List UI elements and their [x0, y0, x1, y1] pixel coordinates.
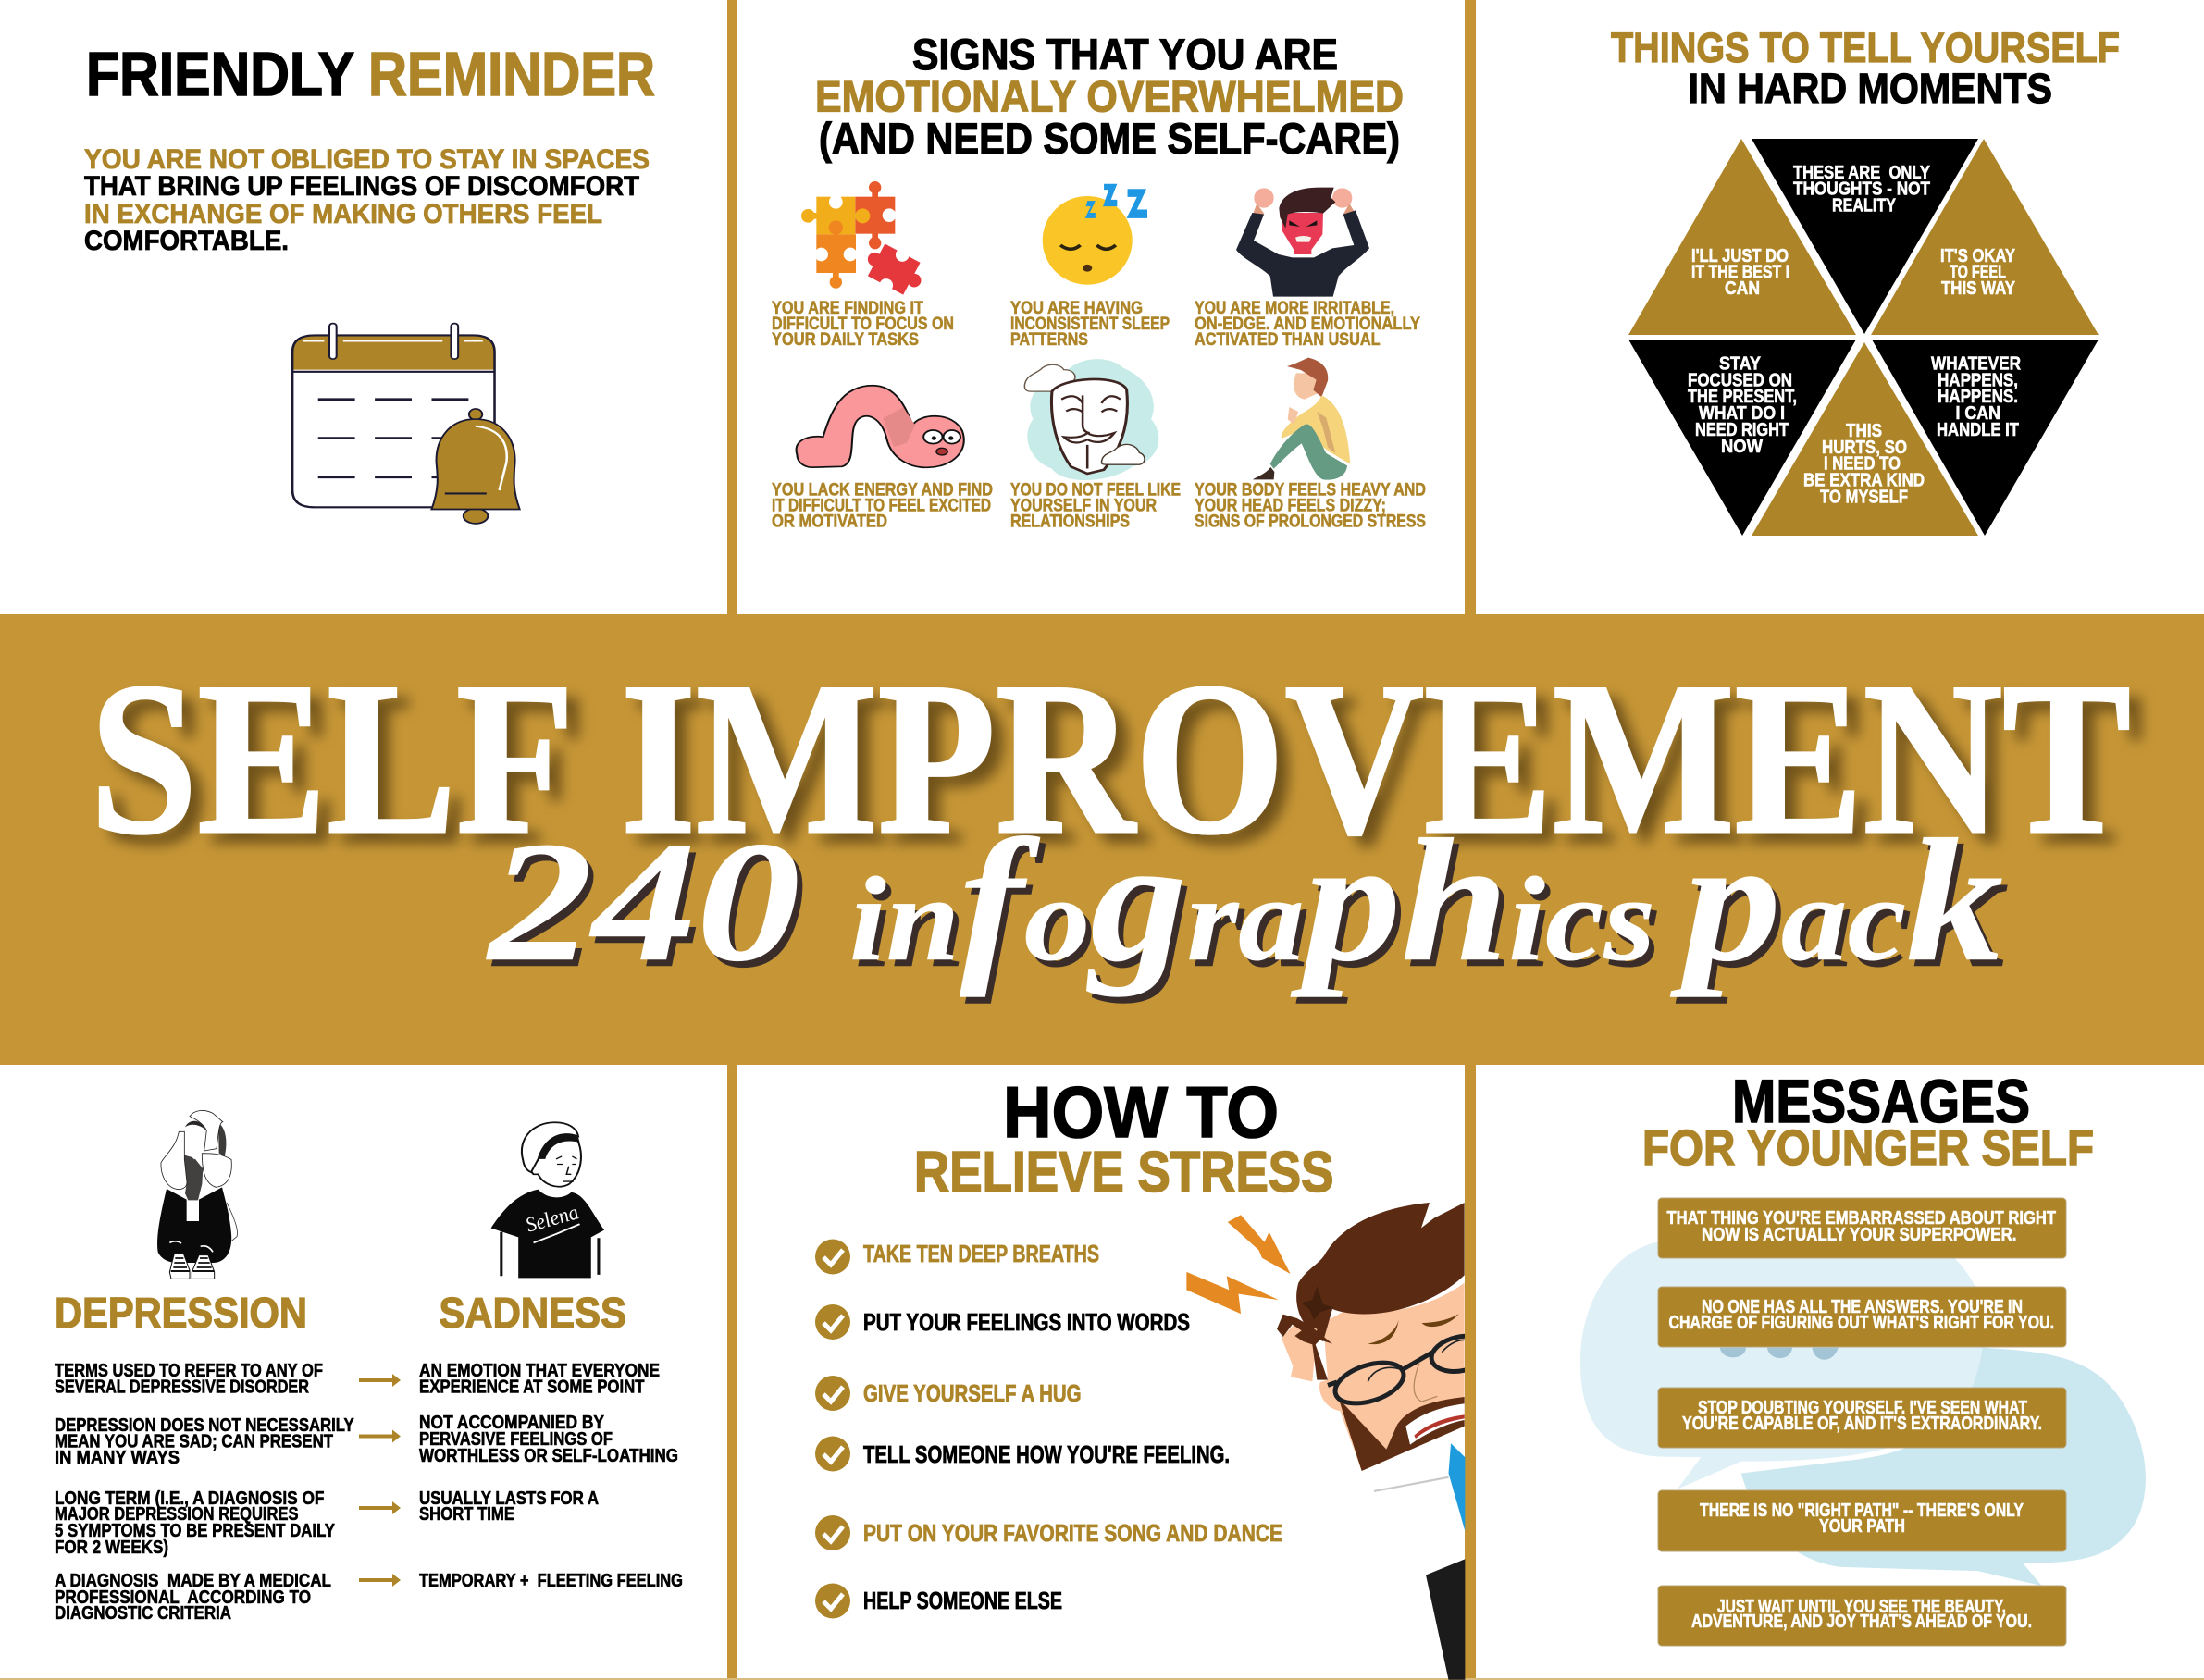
text: steps: TAKE TEN DEEP BREATHS [863, 1240, 1099, 1267]
text: steps: GIVE YOURSELF A HUG [863, 1379, 1082, 1407]
caption: row one: YOU ARE HAVING [1010, 299, 1143, 318]
panel: signs of emotional overwhelm [772, 30, 1426, 532]
text block: sadness points: PERVASIVE FEELINGS OF [419, 1429, 613, 1450]
text: triangle messages: FOCUSED ON [1688, 370, 1792, 390]
checklist: stress relief steps [815, 1240, 1282, 1619]
icon: lightning bolts [1186, 1215, 1291, 1314]
message box 2: NO ONE HAS ALL THE ANSWERS. YOU'RE IN [1702, 1297, 2023, 1317]
heading: things to tell yourself [1611, 24, 2120, 112]
illustration: stressed man [1277, 1203, 1492, 1471]
text block: reminder body: IN EXCHANGE OF MAKING OTHERS FEEL [84, 199, 602, 229]
text: triangle messages: THESE ARE ONLY [1793, 163, 1931, 183]
arrows: depression to sadness [359, 1374, 401, 1587]
caption: row one: YOUR DAILY TASKS [772, 330, 919, 350]
text: triangle messages: NEED RIGHT [1695, 420, 1789, 440]
text: triangle messages: NOW [1721, 437, 1763, 457]
caption: row two: YOURSELF IN YOUR [1010, 497, 1157, 516]
icon: calendar with bell [292, 324, 520, 524]
message box 3: YOU'RE CAPABLE OF, AND IT'S EXTRAORDINARY. [1682, 1414, 2042, 1434]
subtitle: 240 infographics pack: pack [1670, 804, 2003, 998]
message box 5 [1658, 1586, 2066, 1646]
text: steps [863, 1240, 1282, 1614]
text block: sadness points: TEMPORARY + FLEETING FEELING [419, 1571, 683, 1591]
heading: messages for younger self [1642, 1067, 2094, 1176]
heading: messages for younger self: FOR YOUNGER SELF [1642, 1120, 2094, 1176]
text: triangle messages: THIS [1846, 421, 1882, 441]
panel: depression vs sadness [55, 1110, 683, 1624]
text: triangle messages: THIS WAY [1941, 278, 2016, 299]
caption: row two [772, 481, 1426, 532]
panel: messages for younger self [1580, 1067, 2146, 1646]
caption: row one [772, 299, 1420, 350]
heading: things to tell yourself: THINGS TO TELL YOURSELF [1611, 24, 2120, 71]
message box 1: THAT THING YOU'RE EMBARRASSED ABOUT RIGHT [1667, 1208, 2056, 1229]
text block: reminder body: COMFORTABLE. [84, 226, 289, 256]
text block: depression points: A DIAGNOSIS MADE BY A MEDICAL [55, 1571, 331, 1591]
heading: signs: SIGNS THAT YOU ARE [912, 30, 1338, 79]
caption: row one: PATTERNS [1010, 330, 1088, 350]
message box 3 [1658, 1388, 2066, 1448]
caption: row two: SIGNS OF PROLONGED STRESS [1195, 513, 1426, 532]
text: triangle messages: TO FEEL [1950, 262, 2006, 282]
caption: row one: DIFFICULT TO FOCUS ON [772, 315, 954, 334]
text block: sadness points [419, 1361, 683, 1591]
text block: reminder body [84, 144, 650, 256]
text block: sadness points: AN EMOTION THAT EVERYONE [419, 1361, 660, 1381]
icon: puzzle pieces [801, 181, 932, 305]
text block: reminder body: YOU ARE NOT OBLIGED TO STAY IN SPACES [84, 144, 650, 175]
text: triangle messages: I NEED TO [1824, 454, 1901, 475]
message box 2 [1658, 1287, 2066, 1347]
subtitle: 240 infographics pack: infographics [849, 804, 1655, 998]
text block: depression points: IN MANY WAYS [55, 1448, 180, 1468]
text: triangle messages: IT'S OKAY [1940, 246, 2016, 266]
caption: row two: YOU LACK ENERGY AND FIND [772, 481, 993, 500]
text block: depression points: FOR 2 WEEKS) [55, 1538, 168, 1558]
text block: sadness points: USUALLY LASTS FOR A [419, 1489, 599, 1509]
icon: sad boy in tee: Selena [522, 1201, 582, 1237]
text: triangle messages: HURTS, SO [1822, 438, 1907, 458]
text: triangle messages: THE PRESENT, [1688, 387, 1797, 407]
caption: row two: OR MOTIVATED [772, 513, 887, 532]
message box 1: NOW IS ACTUALLY YOUR SUPERPOWER. [1702, 1225, 2017, 1245]
caption: row one: YOU ARE MORE IRRITABLE, [1195, 299, 1394, 318]
message box 5: JUST WAIT UNTIL YOU SEE THE BEAUTY, [1717, 1597, 2006, 1617]
text: steps: HELP SOMEONE ELSE [863, 1587, 1062, 1614]
message box 3: STOP DOUBTING YOURSELF. I'VE SEEN WHAT [1698, 1398, 2027, 1418]
icon: girl hiding her face [157, 1110, 238, 1279]
caption: row two: RELATIONSHIPS [1010, 513, 1130, 532]
heading: signs: EMOTIONALY OVERWHELMED [815, 72, 1404, 120]
caption: row one: ON-EDGE. AND EMOTIONALLY [1195, 315, 1420, 334]
heading: things to tell yourself: IN HARD MOMENTS [1688, 65, 2052, 112]
caption: row one: ACTIVATED THAN USUAL [1195, 330, 1381, 350]
heading: signs: (AND NEED SOME SELF-CARE) [819, 114, 1400, 163]
subtitle: 240 infographics pack: 240 [485, 807, 800, 997]
heading: depression: DEPRESSION [55, 1289, 307, 1337]
message box 2: CHARGE OF FIGURING OUT WHAT'S RIGHT FOR YOU. [1669, 1313, 2054, 1333]
message box 4: YOUR PATH [1819, 1516, 1905, 1537]
heading: friendly reminder: FRIENDLY [86, 40, 354, 109]
caption: row two: YOUR HEAD FEELS DIZZY; [1195, 497, 1386, 516]
text block: sadness points: EXPERIENCE AT SOME POINT [419, 1377, 644, 1397]
text block: depression points: DIAGNOSTIC CRITERIA [55, 1603, 231, 1624]
text block: depression points: PROFESSIONAL ACCORDING TO [55, 1587, 311, 1608]
text: triangle messages: HANDLE IT [1937, 420, 2019, 440]
text block: sadness points: SHORT TIME [419, 1504, 514, 1525]
caption: row two: IT DIFFICULT TO FEEL EXCITED [772, 497, 991, 516]
heading: how to relieve stress: RELIEVE STRESS [914, 1141, 1334, 1204]
message box 4 [1658, 1490, 2066, 1551]
text: triangle messages: REALITY [1832, 196, 1897, 216]
text: triangle messages: CAN [1725, 278, 1760, 299]
text block: depression points: MAJOR DEPRESSION REQUIRES [55, 1504, 298, 1525]
text: triangle messages: I'LL JUST DO [1691, 246, 1789, 266]
text block: sadness points: NOT ACCOMPANIED BY [419, 1413, 605, 1433]
panel: how to relieve stress [815, 1071, 1492, 1680]
heading: friendly reminder: REMINDER [368, 40, 655, 109]
text block: depression points: SEVERAL DEPRESSIVE DISORDER [55, 1377, 309, 1397]
subtitle: 240 infographics pack [485, 804, 2003, 998]
text: triangle messages: WHATEVER [1931, 354, 2021, 375]
caption: row one: INCONSISTENT SLEEP [1010, 315, 1170, 334]
text block: depression points: 5 SYMPTOMS TO BE PRESENT DAILY [55, 1521, 336, 1541]
heading: sadness: SADNESS [439, 1289, 626, 1337]
heading: messages for younger self: MESSAGES [1732, 1067, 2030, 1135]
banner: self improvement [0, 614, 2204, 1065]
icon: angry man [1236, 188, 1369, 297]
icon: tired worm [797, 386, 964, 467]
text block: depression points [55, 1361, 354, 1624]
caption: row two: YOUR BODY FEELS HEAVY AND [1195, 481, 1426, 500]
illustration: shirt and jacket [1374, 1443, 1465, 1680]
text block: depression points: LONG TERM (I.E., A DIAGNOSIS OF [55, 1489, 324, 1509]
text: triangle messages: TO MYSELF [1820, 488, 1908, 508]
text block: depression points: TERMS USED TO REFER TO ANY OF [55, 1361, 323, 1381]
caption: row one: YOU ARE FINDING IT [772, 299, 923, 318]
icon: sitting man [1253, 358, 1350, 480]
title: self improvement: SELF [90, 638, 575, 880]
text block: reminder body: THAT BRING UP FEELINGS OF DISCOMFORT [84, 171, 639, 202]
text: triangle messages: HAPPENS, [1938, 370, 2018, 390]
icon: sleeping emoji [1043, 184, 1147, 285]
text: triangle messages [1688, 163, 2021, 508]
text block: sadness points: WORTHLESS OR SELF-LOATHING [419, 1446, 678, 1466]
message box 4: THERE IS NO "RIGHT PATH" -- THERE'S ONLY [1700, 1501, 2024, 1521]
text: steps: PUT ON YOUR FAVORITE SONG AND DANCE [863, 1519, 1282, 1547]
heading: how to relieve stress: HOW TO [1003, 1071, 1279, 1153]
background: speech bubbles [1580, 1242, 2146, 1586]
heading: how to relieve stress [914, 1071, 1334, 1204]
icon: check marks [815, 1240, 850, 1619]
heading: friendly reminder [86, 40, 655, 109]
text: triangle messages: STAY [1719, 354, 1762, 375]
message box 1 [1658, 1198, 2066, 1258]
message box 5: ADVENTURE, AND JOY THAT'S AHEAD OF YOU. [1691, 1612, 2032, 1632]
text: steps: PUT YOUR FEELINGS INTO WORDS [863, 1308, 1190, 1336]
text: triangle messages: IT THE BEST I [1691, 262, 1789, 282]
text block: depression points: DEPRESSION DOES NOT NECESSARILY [55, 1415, 354, 1436]
panel: friendly reminder [84, 40, 655, 524]
text: triangle messages: WHAT DO I [1699, 403, 1785, 424]
text block: depression points: MEAN YOU ARE SAD; CAN PRESENT [55, 1432, 333, 1452]
icon: mask with clouds [1024, 359, 1158, 480]
text: triangle messages: I CAN [1956, 403, 2000, 424]
text: steps: TELL SOMEONE HOW YOU'RE FEELING. [863, 1440, 1230, 1468]
chart: hexagon of triangles [1628, 139, 2099, 536]
heading: signs [815, 30, 1404, 163]
text: triangle messages: BE EXTRA KIND [1803, 471, 1925, 491]
panel: things to tell yourself [1611, 24, 2120, 536]
caption: row two: YOU DO NOT FEEL LIKE [1010, 481, 1181, 500]
text: triangle messages: THOUGHTS - NOT [1793, 179, 1930, 200]
text: triangle messages: HAPPENS. [1938, 387, 2018, 407]
icon: sad boy in tee [491, 1122, 604, 1278]
